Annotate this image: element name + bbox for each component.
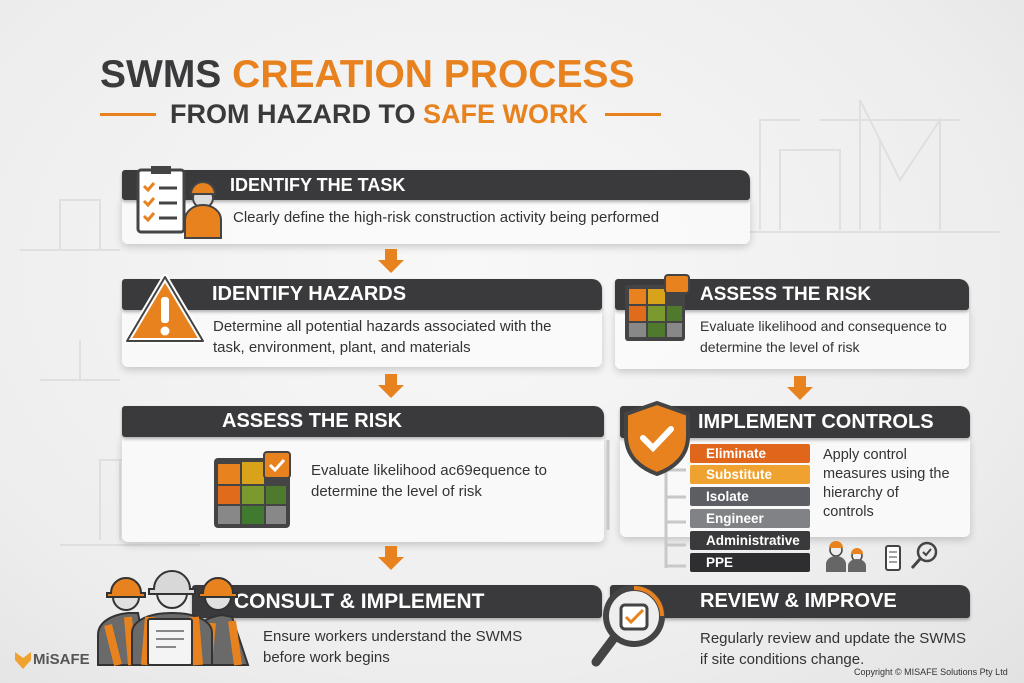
panel: assess the risk (right) [612,274,972,376]
panel: implement controls [606,400,974,572]
text: Evaluate likelihood and consequence to determine the level of risk [700,318,947,355]
panel: review & improve [592,585,972,668]
icons: team clipboard magnifier [826,541,938,572]
title: SWMS CREATION PROCESS [100,53,634,96]
controls list [690,444,810,572]
panel: assess the risk (main) [118,406,608,548]
heading: IMPLEMENT CONTROLS [698,411,934,433]
connectors [606,440,686,568]
controls list: Substitute [706,467,772,482]
controls list: Eliminate [706,446,766,461]
panel: identify the task [118,166,754,250]
controls list: Engineer [706,511,764,526]
heading [615,279,969,310]
arrow [378,249,404,273]
panel: consult & implement [97,570,604,666]
heading: REVIEW & IMPROVE [700,590,897,612]
icon: risk matrix [625,274,690,341]
controls list: PPE [706,555,733,570]
text: Determine all potential hazards associated with the task, environment, plant, and materials [213,318,552,356]
controls list: Isolate [706,489,749,504]
subtitle: FROM HAZARD TO SAFE WORK [170,99,588,129]
icon: magnifier [592,585,665,666]
text: Evaluate likelihood ac69equence to determine the level of risk [311,462,547,500]
heading [610,585,970,618]
text: Ensure workers understand the SWMS before work begins [263,628,522,666]
heading [122,406,604,437]
arrow [787,376,813,400]
icon: risk matrix [214,451,291,528]
heading [192,585,602,618]
heading [122,170,750,200]
logo: MiSAFE [33,651,90,668]
heading: IDENTIFY HAZARDS [212,283,406,305]
icon: workers [97,570,250,666]
heading: ASSESS THE RISK [700,284,871,305]
icon: warning [126,274,204,342]
copyright: Copyright © MISAFE Solutions Pty Ltd [854,667,1008,677]
icon: clipboard worker [136,166,222,239]
text: Apply control measures using the hierarchy of controls [823,447,950,520]
icon: shield [624,400,690,476]
controls list: Administrative [706,533,800,548]
text: Clearly define the high-risk construction activity being performed [233,209,659,226]
text: Regularly review and update the SWMS if site conditions change. [700,630,966,668]
heading: ASSESS THE RISK [222,410,402,432]
heading: CONSULT & IMPLEMENT [234,590,484,613]
heading: IDENTIFY THE TASK [230,175,405,195]
heading [620,406,970,438]
heading [122,279,602,310]
panel: identify hazards [118,274,606,374]
arrow [378,374,404,398]
arrow [378,546,404,570]
